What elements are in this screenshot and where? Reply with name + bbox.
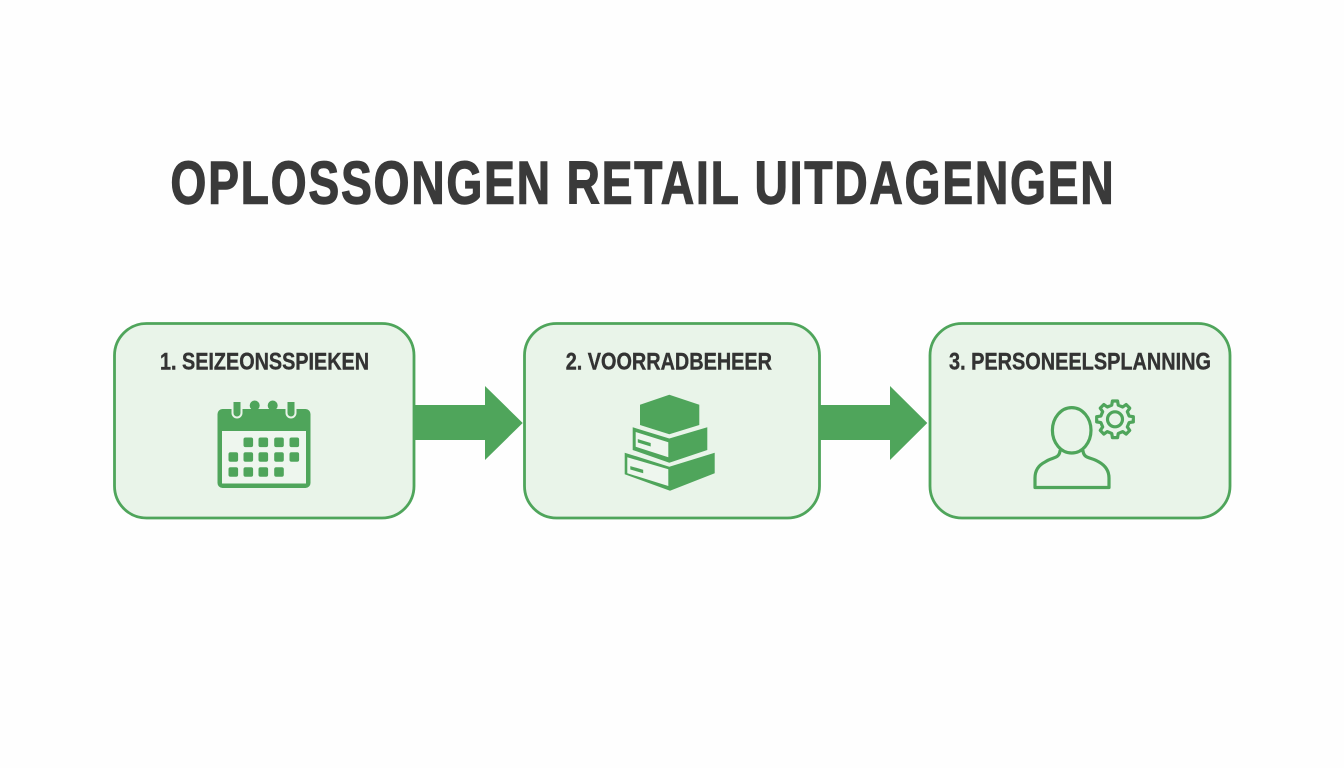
heading: personeelsplanning: 3. PERSONEELSPLANNING: [949, 349, 1211, 376]
heading: seizoenspieken: 1. SEIZEONSSPIEKEN: [160, 349, 369, 376]
panel background: [114, 324, 414, 518]
arrow: step 2 to step 3: [820, 386, 927, 460]
icon: person with gear: [1035, 401, 1133, 488]
icon: stacked boxes: [625, 395, 715, 491]
heading: voorraadbeheer: 2. VOORRADBEHEER: [566, 349, 772, 376]
arrow: step 1 to step 2: [415, 386, 523, 460]
panel: voorraadbeheer: [524, 324, 820, 518]
panel background: [524, 324, 820, 518]
panel background: [930, 324, 1230, 518]
panel: seizoenspieken: [114, 324, 414, 518]
icon: calendar: [218, 400, 310, 488]
panel: personeelsplanning: [930, 324, 1230, 518]
